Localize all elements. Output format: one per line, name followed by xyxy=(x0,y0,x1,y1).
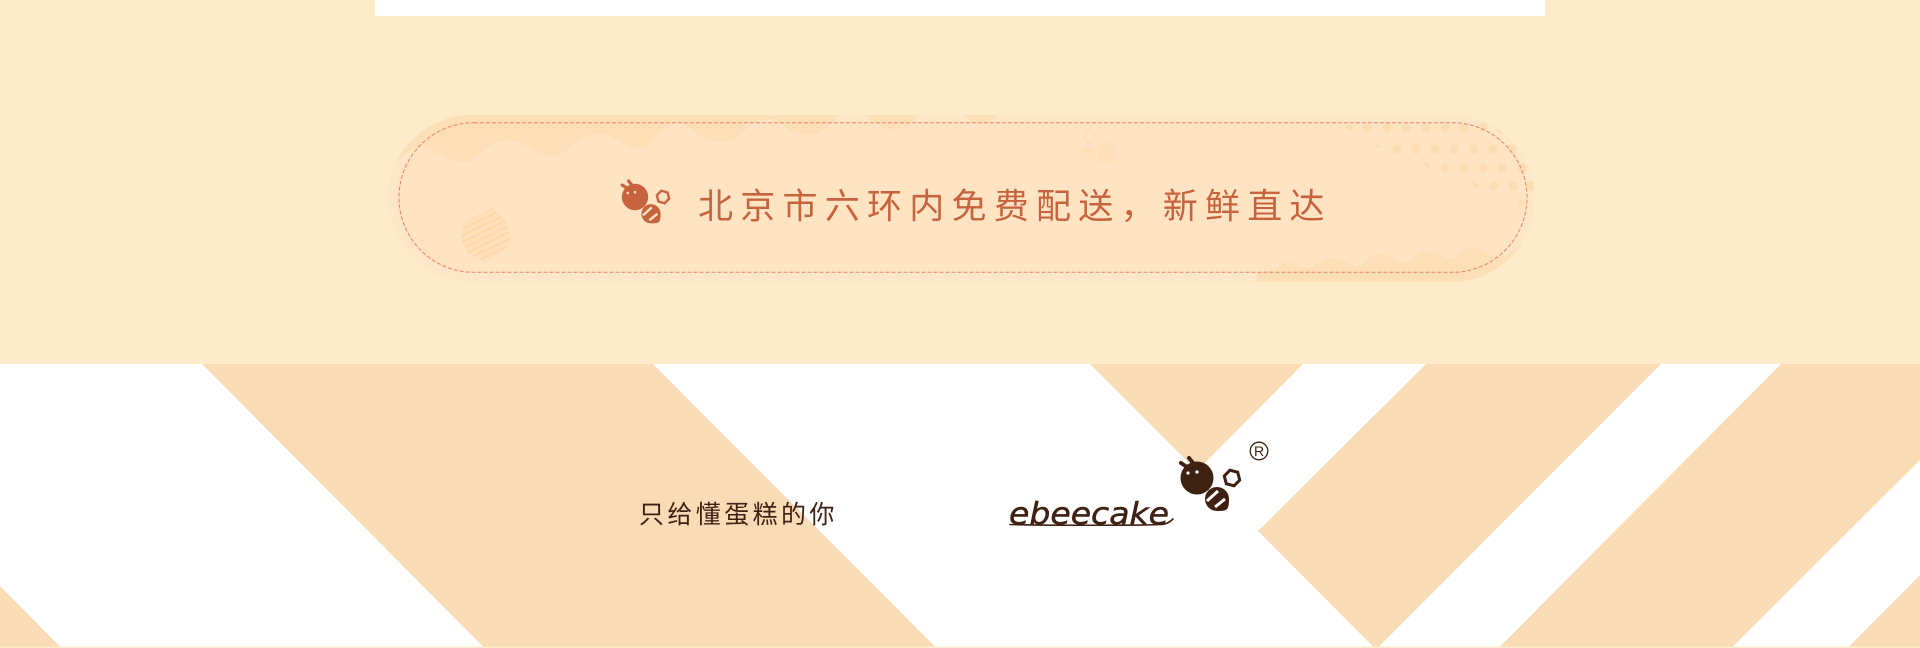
top cream background xyxy=(0,0,1920,364)
pill inner fill xyxy=(396,122,1528,273)
pill outer ring xyxy=(388,115,1535,282)
bottom white panel with diagonal bands xyxy=(0,364,1920,646)
wave decoration: top xyxy=(396,115,997,163)
wordmark: ebeecake xyxy=(1009,497,1169,532)
diagonal band: far right xyxy=(1500,364,1920,646)
diagonal band: bottom right corner xyxy=(1849,575,1920,646)
top white bar xyxy=(375,0,1545,16)
registered mark xyxy=(1250,442,1268,460)
dot pattern decoration xyxy=(1344,122,1536,206)
ghost bee decoration xyxy=(1080,130,1118,164)
striped hexagon decoration xyxy=(461,208,511,262)
diagonal band: right chevron xyxy=(1258,364,1661,646)
banner text: 北京市六环内免费配送，新鲜直达 xyxy=(698,188,1332,226)
icon: bee, brown xyxy=(1180,458,1242,511)
panel: delivery pill banner xyxy=(396,115,1534,282)
logo: ebeecake xyxy=(1009,442,1268,532)
slogan text: 只给懂蛋糕的你 xyxy=(639,501,838,529)
diagonal band: left triangle xyxy=(0,586,60,646)
diagonal band: top triangle xyxy=(1090,364,1303,471)
registered mark: R xyxy=(1254,443,1264,459)
dashed border xyxy=(399,123,1527,272)
icon: bee, orange xyxy=(622,181,671,223)
diagonal band: centre left xyxy=(202,364,935,646)
wave decoration: bottom xyxy=(1257,242,1523,282)
